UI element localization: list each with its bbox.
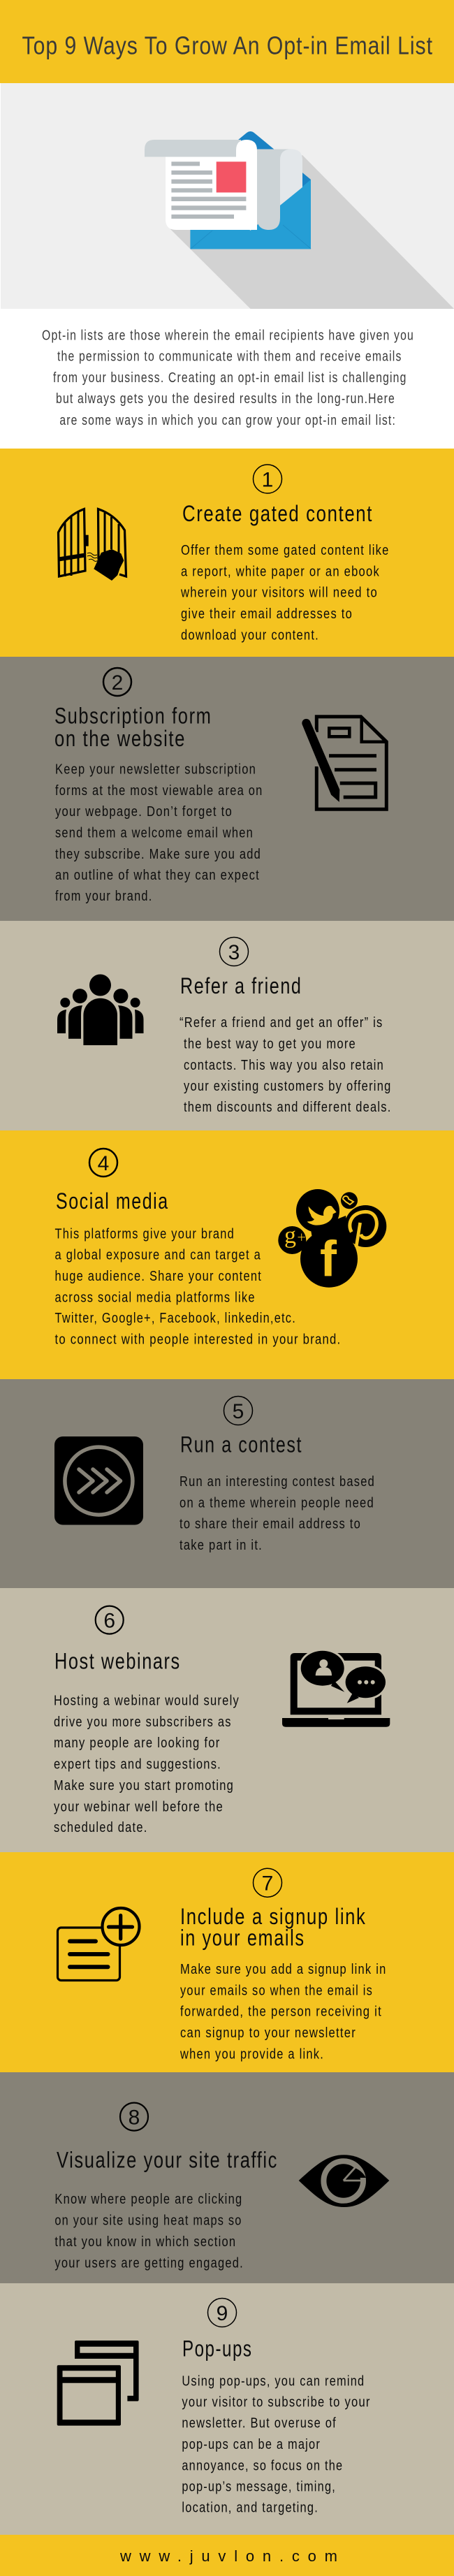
number badge 2 <box>103 668 131 696</box>
body text <box>55 762 263 904</box>
number badge 7: 7 <box>262 1872 273 1895</box>
body text: when you provide a link. <box>180 2047 324 2062</box>
body text: send them a welcome email when <box>55 826 254 841</box>
icon: eye with pie chart <box>299 2155 389 2207</box>
body text: can signup to your newsletter <box>180 2025 356 2041</box>
body text <box>54 1226 341 1347</box>
icon: document with plus <box>57 1908 140 1980</box>
body text: give their email addresses to <box>181 606 353 622</box>
body text <box>180 1474 375 1553</box>
body text: contacts. This way you also retain <box>184 1058 384 1073</box>
heading: Pop-ups <box>182 2336 253 2362</box>
panel: 9 pop-ups <box>0 2283 454 2535</box>
body text <box>182 2373 371 2516</box>
body text: huge audience. Share your content <box>54 1269 262 1284</box>
number badge 3 <box>219 938 249 966</box>
number badge 3: 3 <box>228 941 240 964</box>
body text: Make sure you start promoting <box>54 1778 234 1793</box>
number badge 5 <box>224 1396 253 1425</box>
number badge 1: 1 <box>262 468 273 492</box>
body text: take part in it. <box>180 1538 263 1553</box>
heading: Host webinars <box>54 1649 181 1674</box>
heading: Visualize your site traffic <box>57 2148 278 2173</box>
number badge 1 <box>253 465 282 493</box>
body text: the best way to get you more <box>184 1037 356 1052</box>
heading: Social media <box>56 1188 169 1214</box>
number badge 9 <box>208 2299 236 2327</box>
body text: your visitor to subscribe to your <box>182 2394 371 2410</box>
body text <box>54 2192 244 2271</box>
footer bar <box>0 2535 454 2576</box>
number badge 8 <box>120 2103 148 2131</box>
icon: form document and pen <box>301 717 386 809</box>
body text: Run an interesting contest based <box>180 1474 375 1490</box>
body text <box>180 1962 387 2062</box>
body text: on a theme wherein people need <box>180 1495 374 1511</box>
body text: Keep your newsletter subscription <box>55 762 256 777</box>
number badge 8: 8 <box>129 2106 140 2130</box>
heading: Subscription form <box>54 703 212 728</box>
heading <box>54 703 212 751</box>
body text <box>54 1694 240 1835</box>
body text: Using pop-ups, you can remind <box>182 2373 365 2389</box>
panel: 4 social media <box>0 1130 454 1379</box>
body text: drive you more subscribers as <box>54 1715 232 1730</box>
intro text block <box>42 328 414 428</box>
body text: forwarded, the person receiving it <box>180 2004 382 2020</box>
icon: social media bubbles: g <box>284 1223 296 1249</box>
number badge 2: 2 <box>112 671 123 694</box>
body text: your webinar well before the <box>54 1799 224 1814</box>
heading: Run a contest <box>180 1432 302 1457</box>
body text: Make sure you add a signup link in <box>180 1962 387 1977</box>
number badge 6: 6 <box>103 1610 115 1633</box>
title banner <box>0 0 454 83</box>
body text: across social media platforms like <box>54 1290 256 1305</box>
body text: forms at the most viewable area on <box>55 783 263 799</box>
body text <box>180 1015 391 1115</box>
icon: social media bubbles <box>278 1189 386 1288</box>
body text: your existing customers by offering <box>184 1079 391 1094</box>
body text: many people are looking for <box>54 1735 221 1751</box>
body text: Hosting a webinar would surely <box>54 1694 240 1709</box>
body text: Know where people are clicking <box>54 2192 242 2207</box>
panel: 2 subscription form <box>0 657 454 921</box>
body text: annoyance, so focus on the <box>182 2458 343 2473</box>
icon: forward arrows button <box>54 1436 143 1525</box>
body text: they subscribe. Make sure you add <box>55 847 261 862</box>
body text: on your site using heat maps so <box>54 2213 242 2229</box>
body text: your emails so when the email is <box>180 1984 373 1999</box>
number badge 9: 9 <box>217 2302 228 2325</box>
body text: Offer them some gated content like <box>181 543 390 558</box>
number badge 4: 4 <box>98 1152 109 1175</box>
body text: “Refer a friend and get an offer” is <box>180 1015 383 1031</box>
heading: in your emails <box>180 1925 305 1950</box>
icon: open gate <box>59 509 126 581</box>
number badge 4 <box>89 1149 117 1177</box>
body text: newsletter. But overuse of <box>182 2416 337 2431</box>
panel: 3 refer a friend <box>0 921 454 1130</box>
footer url: www.juvlon.com <box>119 2547 337 2565</box>
icon: laptop with chat bubbles <box>282 1649 390 1727</box>
body text: pop-up’s message, timing, <box>182 2480 336 2495</box>
icon: envelope and newsletter <box>145 131 311 249</box>
body text: scheduled date. <box>54 1820 148 1835</box>
hero panel: email illustration <box>1 83 454 309</box>
body text: an outline of what they can expect <box>55 868 260 883</box>
body text: to connect with people interested in your brand. <box>54 1332 341 1347</box>
heading: Create gated content <box>182 501 373 526</box>
panel: 6 host webinars <box>0 1588 454 1852</box>
icon: group of people <box>57 974 144 1045</box>
body text: download your content. <box>181 627 319 643</box>
body text <box>180 543 390 643</box>
body text: wherein your visitors will need to <box>180 585 378 601</box>
body text: a global exposure and can target a <box>54 1248 261 1263</box>
heading: Include a signup link <box>180 1904 366 1929</box>
icon: social media bubbles: f <box>320 1232 337 1288</box>
number badge 7 <box>253 1868 282 1897</box>
body text: from your brand. <box>55 889 152 904</box>
panel: 7 include a signup link <box>0 1852 454 2072</box>
icon: overlapping windows <box>57 2341 139 2426</box>
number badge 6 <box>96 1606 124 1634</box>
body text: location, and targeting. <box>182 2501 318 2516</box>
heading: Refer a friend <box>180 973 302 998</box>
body text: to share their email address to <box>180 1517 361 1532</box>
body text: pop-ups can be a major <box>182 2437 321 2452</box>
body text: a report, white paper or an ebook <box>181 564 380 579</box>
heading: on the website <box>54 726 186 751</box>
body text: This platforms give your brand <box>54 1226 235 1242</box>
body text: expert tips and suggestions. <box>54 1757 221 1773</box>
panel: 5 run a contest <box>0 1379 454 1588</box>
panel: 8 visualize your site traffic <box>0 2072 454 2283</box>
body text: Twitter, Google+, Facebook, linkedin,etc. <box>54 1311 296 1326</box>
body text: your webpage. Don’t forget to <box>55 804 233 820</box>
body text: that you know in which section <box>54 2234 236 2250</box>
long shadow <box>170 155 454 309</box>
panel: 1 create gated content <box>0 449 454 657</box>
body text: your users are getting engaged. <box>54 2255 244 2271</box>
number badge 5: 5 <box>233 1400 244 1423</box>
heading <box>180 1904 366 1950</box>
body text: them discounts and different deals. <box>184 1100 391 1115</box>
